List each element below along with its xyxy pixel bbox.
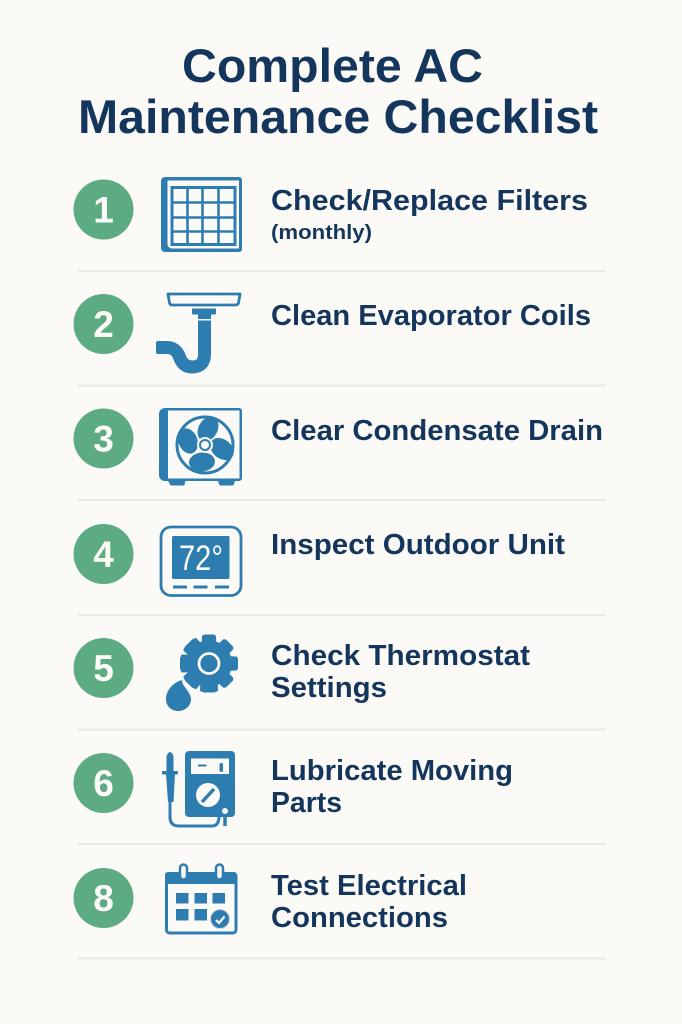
number badge 4 [74, 524, 134, 584]
label: check/replace filters [271, 185, 588, 244]
row 8: electrical connections [74, 864, 467, 934]
number badge 4: 4 [93, 534, 114, 575]
number badge 8 [74, 868, 134, 928]
title [78, 39, 598, 143]
icon: multimeter [162, 751, 235, 826]
icon: calendar with check [165, 864, 237, 933]
label: check thermostat settings: Settings [271, 672, 387, 704]
title: Maintenance Checklist [78, 90, 598, 143]
label: check/replace filters: Check/Replace Filters [271, 185, 588, 217]
icon: drain pipe [156, 294, 240, 367]
icon: air filter [161, 177, 242, 252]
row 1: filters [74, 177, 588, 252]
label: test electrical connections: Connections [271, 902, 448, 934]
number badge 6 [74, 753, 134, 813]
number badge 5: 5 [93, 648, 114, 689]
icon: outdoor fan unit [159, 408, 242, 485]
row 4: outdoor unit [74, 524, 566, 596]
label: test electrical connections: Test Electrical [271, 870, 467, 902]
label: lubricate moving parts [271, 755, 513, 819]
number badge 2 [74, 294, 134, 354]
number badge 1 [74, 180, 134, 240]
label: check thermostat settings: Check Thermostat [271, 640, 531, 672]
label: clean evaporator coils: Clean Evaporator Coils [271, 300, 591, 332]
icon: thermostat [161, 527, 241, 596]
number badge 5 [74, 638, 134, 698]
label: check/replace filters: (monthly) [271, 222, 372, 244]
row 2: coils [74, 294, 591, 367]
number badge 1: 1 [93, 190, 114, 230]
label: lubricate moving parts: Parts [271, 787, 342, 819]
number badge 6: 6 [93, 763, 114, 804]
icon: gear and oil drop [166, 634, 238, 711]
label: lubricate moving parts: Lubricate Moving [271, 755, 513, 787]
number badge 3 [74, 408, 134, 468]
row 5: thermostat settings [74, 634, 531, 711]
number badge 2: 2 [93, 304, 114, 345]
icon: thermostat: 72° [179, 539, 223, 578]
number badge 8: 8 [93, 878, 114, 919]
label: inspect outdoor unit: Inspect Outdoor Unit [271, 529, 566, 561]
label: clear condensate drain: Clear Condensate Drain [271, 415, 603, 447]
label: check thermostat settings [271, 640, 531, 704]
number badge 3: 3 [93, 418, 114, 460]
title: Complete AC [182, 39, 483, 92]
label: test electrical connections [271, 870, 467, 934]
row 6: moving parts [74, 751, 513, 826]
row 3: condensate drain [74, 408, 603, 485]
